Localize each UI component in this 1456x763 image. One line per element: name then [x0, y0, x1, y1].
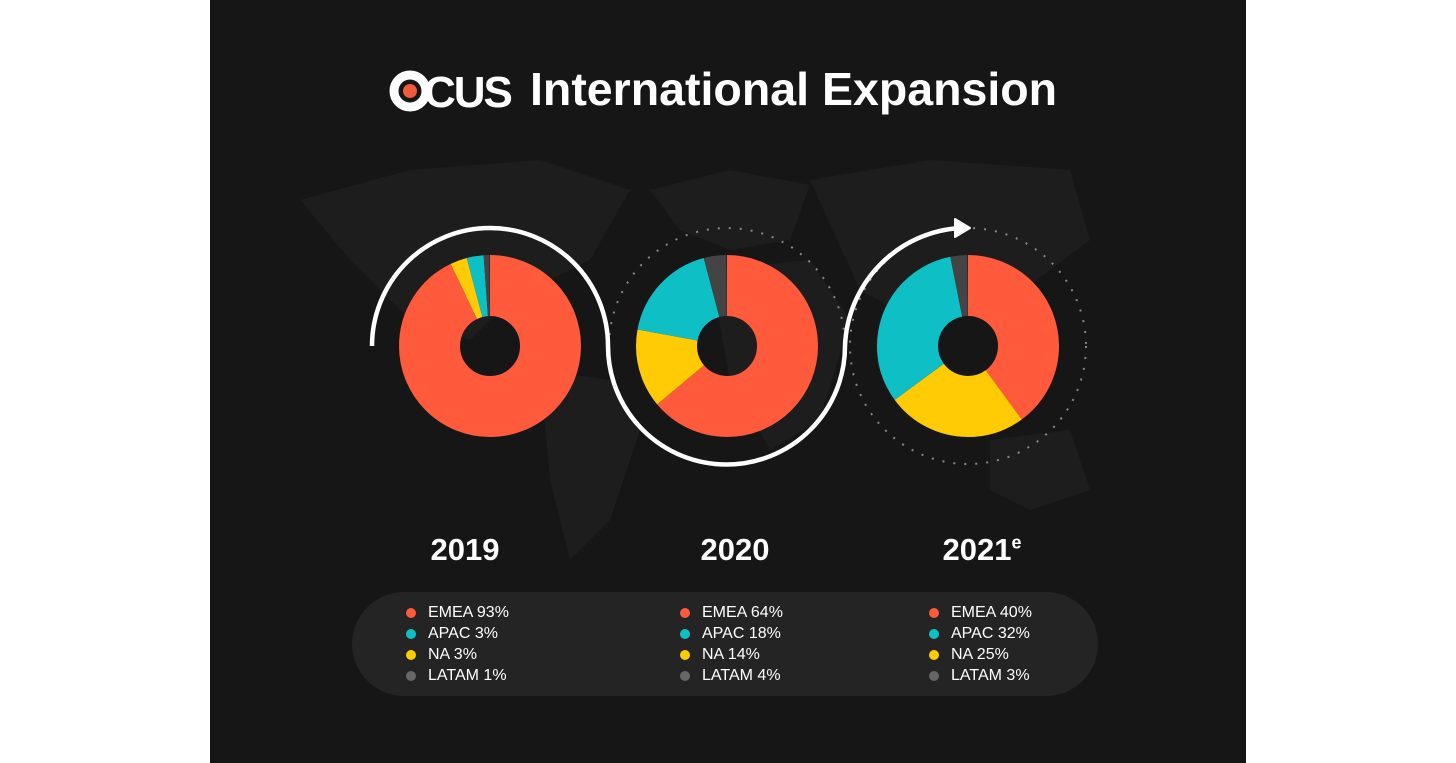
- legend 2021: LATAM 3%: [951, 667, 1030, 684]
- donut 2020: [666, 286, 788, 406]
- legend 2019: [406, 604, 509, 684]
- legend 2019: APAC 3%: [428, 625, 498, 642]
- legend pill: [352, 592, 1098, 696]
- logo: OCUS: CUS: [424, 68, 512, 116]
- legend 2021: [929, 604, 1032, 684]
- title: International Expansion: [530, 63, 1057, 115]
- panel: background: 2020: [701, 532, 769, 567]
- legend 2021: EMEA 40%: [951, 604, 1032, 621]
- legend 2021: APAC 32%: [951, 625, 1030, 642]
- legend 2020: LATAM 4%: [702, 667, 781, 684]
- legend 2019: EMEA 93%: [428, 604, 509, 621]
- arrow: growth path: [372, 219, 970, 464]
- donut 2019: [430, 286, 550, 406]
- donut 2021: [908, 286, 1028, 406]
- legend 2020: NA 14%: [702, 646, 760, 663]
- legend 2019: NA 3%: [428, 646, 477, 663]
- legend 2021: NA 25%: [951, 646, 1009, 663]
- legend 2020: APAC 18%: [702, 625, 781, 642]
- chart: donuts and path: [370, 218, 1087, 467]
- world map silhouette: [210, 0, 1246, 763]
- year labels: 2019: [431, 532, 499, 567]
- legend 2020: EMEA 64%: [702, 604, 783, 621]
- legend 2020: [680, 604, 783, 684]
- legend 2019: LATAM 1%: [428, 667, 507, 684]
- panel: background: 2021e: [942, 532, 1021, 567]
- panel: background: [210, 0, 1246, 763]
